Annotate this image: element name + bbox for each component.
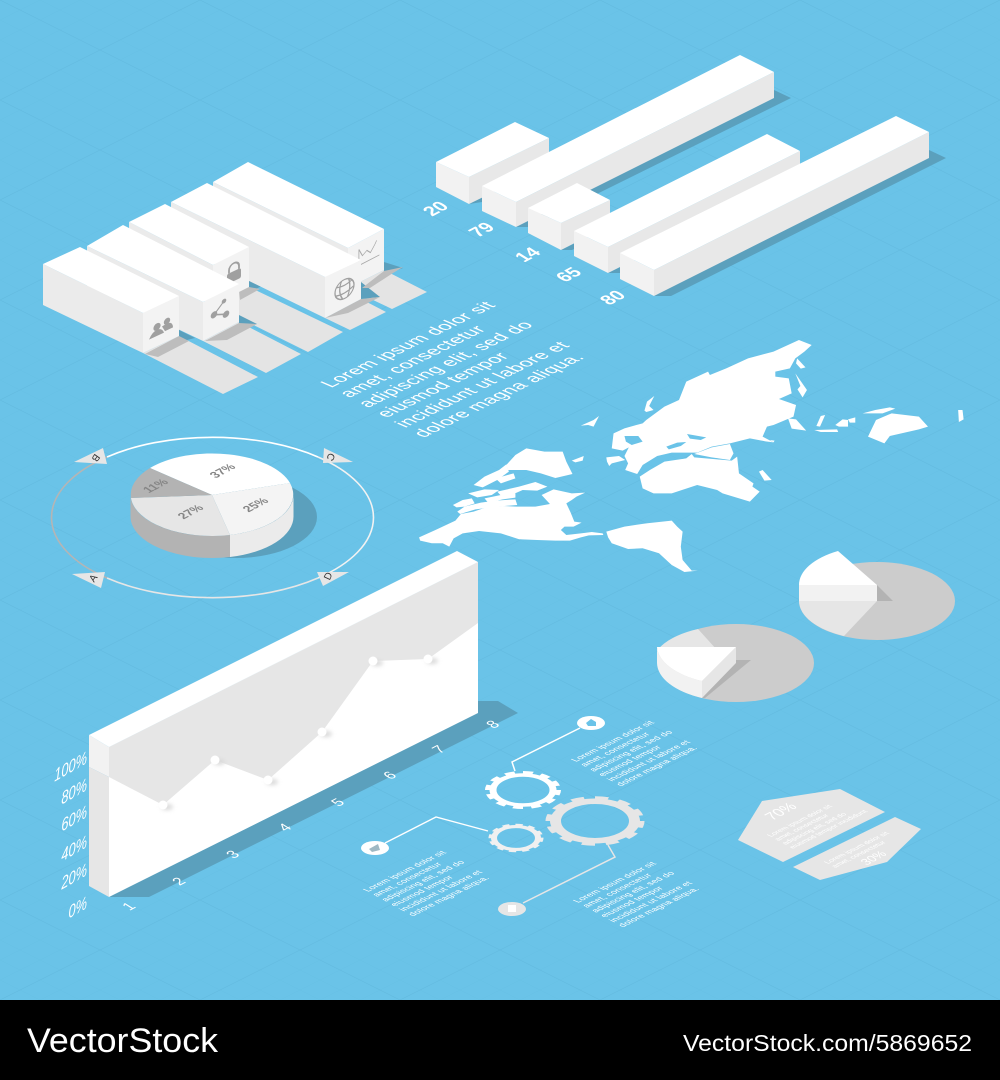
bar: 65 [574,134,800,273]
watermark footer [0,1000,1000,1080]
gear large [549,798,641,844]
arrow C [323,448,353,463]
x axis labels: 8 [483,719,504,731]
arrow A [72,572,105,588]
panel: pie chart with orbit [52,437,373,598]
text block: main lorem ipsum: adipiscing elit, sed do [352,318,538,410]
panel: 70% callout shape: adipiscing elit, sed do [779,812,849,846]
bar 4 [171,183,361,318]
bar value labels: 14 [509,244,546,265]
text block: top: eiusmod tempor [596,744,664,777]
callout icon bottom [498,902,526,916]
panel: 30% callout shape: 30% [857,848,890,867]
eurasia [612,340,812,474]
pie percentages: 25% [239,495,272,514]
new guinea [863,407,895,413]
pie percentages: 37% [206,461,239,480]
x axis labels: 5 [328,797,349,809]
pie percentages: 27% [174,502,207,521]
x axis labels: 2 [169,876,190,888]
panel: 30% callout shape: Lorem ipsum dolor sit [821,831,891,865]
icon: people [149,315,173,340]
y axis labels [54,748,87,923]
world map [419,340,964,572]
bar: 20 [436,122,549,204]
x axis labels: 6 [380,770,401,782]
text block: left: amet, consectetur [370,861,444,898]
x axis labels: 1 [119,901,140,913]
panel: 70% callout shape: 70% [762,801,801,823]
connector bottom [523,845,615,903]
australia [868,413,928,443]
asian islands [644,358,855,442]
icon: padlock [227,260,241,284]
pie side faces [130,495,294,558]
panel: 30% callout shape [793,817,921,880]
wall shadow [109,701,518,897]
text block: top: amet, consectetur [578,731,652,768]
connector top [512,728,580,771]
watermark footer: VectorStock [27,1022,219,1060]
seas [624,434,706,449]
text block: main lorem ipsum: dolore magna aliqua. [408,351,589,440]
callout icon left [361,841,389,855]
bar 1 [43,247,179,353]
africa [640,454,760,502]
panel: right small pie [799,551,955,640]
text block: left: dolore magna aliqua. [406,875,492,917]
bar shadows [145,262,403,357]
canadian arctic islands [453,464,547,514]
gear white [488,772,558,808]
bar value labels: 65 [550,264,586,285]
bar: 14 [528,183,610,250]
shadows [469,90,946,296]
bar value labels: 80 [594,287,630,308]
icon: share [211,297,229,324]
panel: area chart wall [54,551,518,923]
slice 27% [131,495,230,536]
bar 5 [213,162,384,288]
bar value labels: 20 [417,198,453,219]
data points [158,654,438,810]
y axis labels: 60% [61,802,87,836]
callout icon top [577,716,605,730]
text block: top: adipiscing elit, sed do [587,729,675,773]
text block: left [355,849,499,917]
panel: 70% callout shape: Lorem ipsum dolor sit [764,804,834,838]
orbit ring arcs [52,437,373,598]
text block: bottom: adipiscing elit, sed do [589,870,677,914]
madagascar [759,470,772,481]
y axis labels: 0% [69,893,87,923]
panel: 70% callout shape: eiusmod tempor incididunt [786,809,870,850]
text block: bottom: amet, consectetur [580,872,654,909]
text block: main lorem ipsum: amet, consectetur [334,323,491,400]
text block: bottom: eiusmod tempor [598,885,666,918]
watermark footer: VectorStock.com/5869652 [683,1030,972,1056]
x axis labels: 7 [429,744,450,756]
arrow B: B [89,452,102,464]
y axis labels: 100% [54,748,87,786]
arrow B [74,448,107,464]
panel: 30% callout shape: amet, consectetur [829,839,889,869]
text block: left: eiusmod tempor [388,874,456,907]
text block: bottom [565,860,709,928]
top face [89,551,478,747]
text block: left: adipiscing elit, sed do [379,859,467,903]
slice 37% [150,453,290,495]
iceland [572,456,584,462]
text block: top: dolore magna aliqua. [614,745,700,787]
y axis labels: 80% [61,775,87,809]
panel: 70% callout shape: amet, consectetur [772,812,832,842]
floor tiles under bars [143,270,427,394]
bar value labels [417,198,630,308]
new zealand [958,410,964,422]
text block: main lorem ipsum: eiusmod tempor [371,350,514,420]
uk and ireland [606,456,625,466]
text block: left: Lorem ipsum dolor sit [361,849,449,893]
bar: 80 [620,116,929,296]
icon: line chart [358,239,379,266]
text block: main lorem ipsum: Lorem ipsum dolor sit [315,299,501,390]
bar: 79 [482,55,774,227]
greenland [506,448,572,478]
y axis labels: 40% [61,832,87,866]
bar 2 [87,225,239,341]
svalbard [581,416,599,427]
panel: gears diagram [355,716,709,928]
panel: 70% callout shape [738,789,885,862]
slice 25% [212,483,293,535]
text block: top [563,719,707,787]
arrow C: C [324,451,337,462]
x axis labels [119,719,504,913]
panel: left small pie [657,624,814,702]
text block: bottom: dolore magna aliqua. [616,886,702,928]
slice 11% [131,468,212,498]
text block: top: Lorem ipsum dolor sit [569,719,657,763]
pie shadow [155,476,317,558]
north america [419,489,603,547]
text block: bottom: Lorem ipsum dolor sit [571,860,659,904]
south america [606,521,698,572]
bar value labels: 79 [463,219,499,240]
arabia [694,444,734,460]
gear small [490,825,542,851]
arrow A: A [87,572,100,584]
connector left [385,817,488,843]
front face [109,562,478,897]
text block: left: incididunt ut labore et [397,869,485,912]
text block: bottom: incididunt ut labore et [607,880,695,923]
panel: isometric bars with icons (top left) [43,162,427,394]
text block: main lorem ipsum: incididunt ut labore et [389,339,575,430]
x axis labels: 3 [223,849,244,861]
pie percentages [139,461,272,521]
area above line [109,562,478,805]
y axis labels: 20% [61,860,87,895]
text block: main lorem ipsum [304,299,604,440]
arrow D [317,571,349,586]
icon: globe [335,275,354,303]
left end face [89,735,109,897]
bar 3 [129,204,249,305]
arrow D: D [322,571,335,582]
text block: top: incididunt ut labore et [605,739,693,782]
panel: isometric value bars (top right) [417,55,946,308]
x axis labels: 4 [275,822,296,834]
pie percentages: 11% [139,477,172,495]
